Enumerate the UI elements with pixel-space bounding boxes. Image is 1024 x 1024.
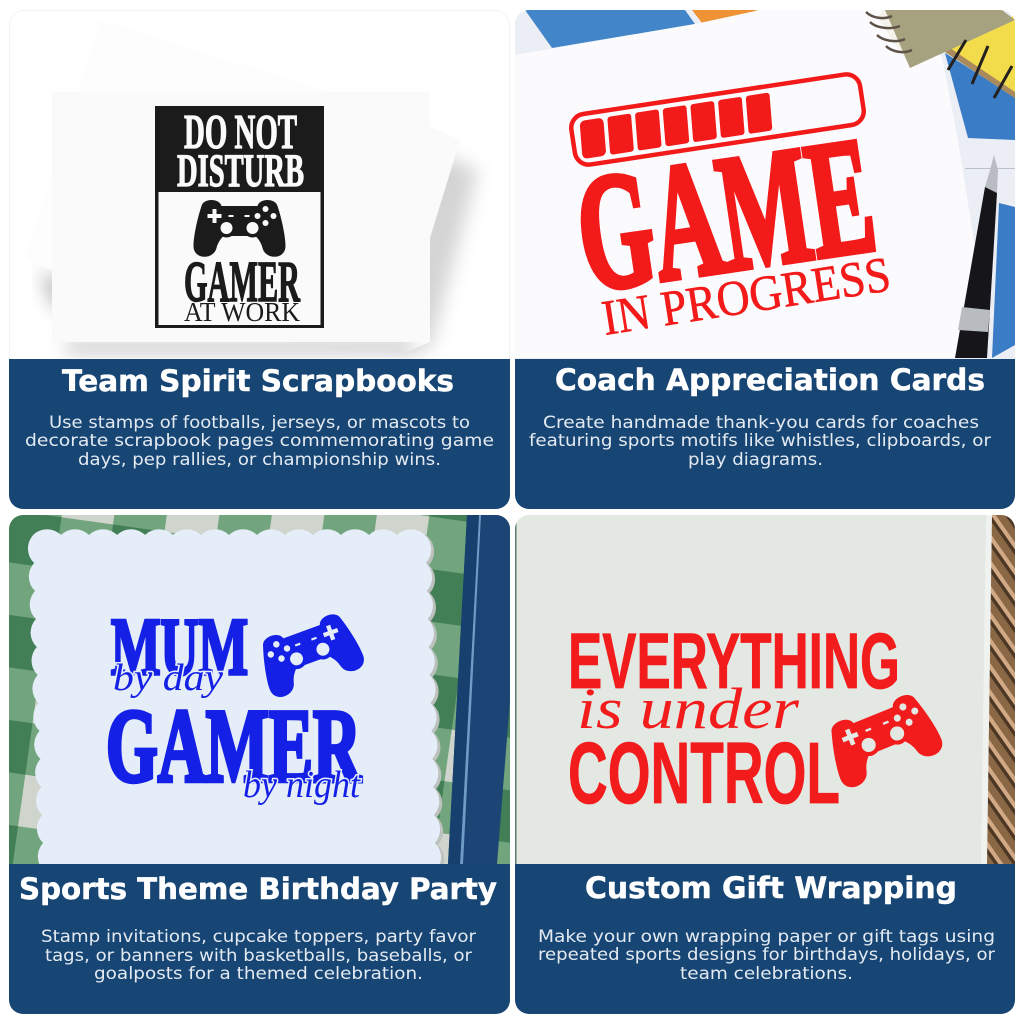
- stamp: mum by day gamer by night: by day: [113, 657, 223, 699]
- stamp: mum by day gamer by night: GAMER: [106, 687, 362, 804]
- description: Make your own wrapping paper or gift tags using: [538, 927, 995, 947]
- description: repeated sports designs for birthdays, holidays, or: [538, 945, 995, 965]
- photo: pale paper beside rope with red stamp: [515, 515, 1015, 865]
- description: play diagrams.: [688, 450, 823, 470]
- caption panel: [9, 359, 510, 509]
- caption panel: [515, 864, 1015, 1014]
- icon: game controller red: [832, 695, 942, 788]
- notebooks: [866, 10, 1015, 98]
- description: tags, or banners with basketballs, baseballs, or: [45, 946, 472, 966]
- stamp: do not disturb gamer at work: GAMER: [184, 249, 301, 314]
- icon: game controller blue: [263, 614, 364, 697]
- progress bar: [569, 72, 866, 167]
- card: Coach Appreciation Cards: [515, 10, 1015, 509]
- caption panel: [9, 864, 510, 1014]
- description: [538, 927, 995, 984]
- description: Stamp invitations, cupcake toppers, party favor: [41, 927, 476, 947]
- description: [529, 413, 991, 470]
- stamp: mum by day gamer by night: [106, 601, 367, 806]
- heading: Custom Gift Wrapping: [585, 871, 957, 905]
- description: Create handmade thank-you cards for coaches: [543, 413, 979, 433]
- caption panel: [515, 359, 1015, 509]
- stamp: do not disturb gamer at work: DISTURB: [177, 145, 304, 197]
- card: Custom Gift Wrapping: [515, 515, 1015, 1014]
- card: Sports Theme Birthday Party: [9, 515, 510, 1014]
- stamp: everything is under control: CONTROL: [568, 725, 840, 822]
- stamp: mum by day gamer by night: by night: [243, 764, 361, 806]
- stamp: mum by day gamer by night: MUM: [111, 601, 248, 692]
- stamp: everything is under control: [570, 632, 942, 804]
- heading: Coach Appreciation Cards: [555, 363, 985, 397]
- rope edge: [987, 515, 1015, 865]
- description: days, pep rallies, or championship wins.: [78, 450, 441, 470]
- stamp: do not disturb gamer at work: DO NOT: [184, 104, 297, 159]
- description: [25, 413, 494, 470]
- photo: scalloped card on gingham cloth with blue stamp: [9, 515, 510, 877]
- stamp: do not disturb gamer at work: AT WORK: [184, 297, 300, 327]
- description: Use stamps of footballs, jerseys, or mascots to: [49, 413, 470, 433]
- photo: stacked white cards with black stamp: [9, 10, 510, 370]
- description: featuring sports motifs like whistles, clipboards, or: [529, 431, 991, 451]
- description: team celebrations.: [680, 964, 853, 984]
- description: [41, 927, 476, 984]
- description: decorate scrapbook pages commemorating game: [25, 431, 494, 451]
- stamp: do not disturb gamer at work: [155, 104, 324, 328]
- heading: Sports Theme Birthday Party: [19, 872, 497, 906]
- photo: paper on desk with red stamp: [515, 10, 1015, 360]
- folder strip: [448, 515, 510, 864]
- heading: Team Spirit Scrapbooks: [62, 364, 454, 398]
- stamp: game in progress: IN PROGRESS: [598, 246, 894, 346]
- description: goalposts for a themed celebration.: [94, 964, 423, 984]
- icon: pen: [955, 155, 998, 358]
- stamp: game in progress: [566, 72, 894, 346]
- icon: game controller black: [194, 200, 286, 257]
- stamp: everything is under control: is under: [577, 676, 800, 741]
- card: Team Spirit Scrapbooks: [9, 10, 510, 509]
